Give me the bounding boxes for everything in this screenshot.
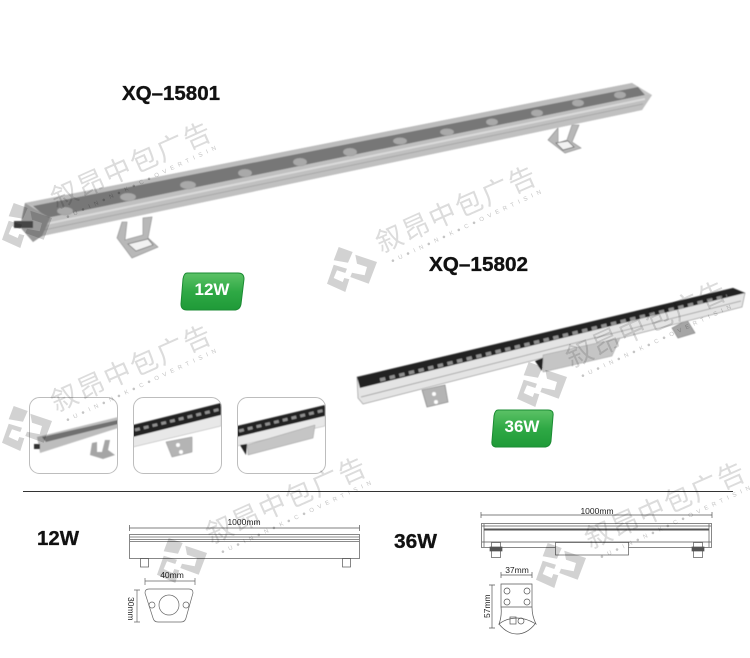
dimension drawing: 36W side view <box>481 506 712 558</box>
label: 36W: 36W <box>394 531 437 553</box>
dimension drawing: 12W end view: 40mm <box>160 570 184 580</box>
badge: 36W <box>492 410 553 447</box>
watermark 4 <box>2 320 217 451</box>
badge: 12W <box>181 273 244 310</box>
watermark 6: 叙昂中包广告 <box>580 457 750 554</box>
watermark 3 <box>517 276 732 407</box>
product: 36W LED wall washer bar <box>357 288 745 407</box>
watermark 5 <box>157 452 372 583</box>
title: XQ-15801: XQ–15801 <box>122 83 220 105</box>
thumbnail panel: mounting bracket detail <box>133 398 222 474</box>
watermark 1: 叙昂中包广告 <box>46 117 216 214</box>
product: 12W LED wall washer bar <box>14 83 652 258</box>
watermark 1: ●U●IN●N●K●C●OVERTISIN <box>65 146 217 221</box>
watermark 6: ●U●IN●N●K●C●OVERTISIN <box>599 486 750 561</box>
dimension drawing: 12W side view <box>130 517 360 567</box>
badge: 36W: 36W <box>505 417 540 436</box>
watermark 3: 叙昂中包广告 <box>561 276 731 373</box>
watermark 6 <box>536 457 750 588</box>
dimension drawing: 36W side view: 1000mm <box>580 506 614 516</box>
watermark 5: 叙昂中包广告 <box>201 452 371 549</box>
dimension drawing: 12W end view: 30mm <box>126 597 136 621</box>
thumbnail panel: driver box detail <box>237 398 326 474</box>
title: XQ-15802: XQ–15802 <box>429 254 528 276</box>
watermark 2: ●U●IN●N●K●C●OVERTISIN <box>390 190 542 265</box>
watermark 4: 叙昂中包广告 <box>46 320 216 417</box>
badge: 12W: 12W <box>195 280 230 299</box>
dimension drawing: 36W bracket: 37mm <box>505 565 529 575</box>
watermark 2 <box>327 161 542 292</box>
dimension drawing: 36W bracket <box>482 565 536 634</box>
watermark 3: ●U●IN●N●K●C●OVERTISIN <box>580 305 732 380</box>
label: 12W: 12W <box>37 528 79 550</box>
watermark 5: ●U●IN●N●K●C●OVERTISIN <box>220 481 372 556</box>
dimension drawing: 12W end view <box>126 570 195 622</box>
watermark 1 <box>2 117 217 248</box>
dimension drawing: 36W bracket: 57mm <box>482 594 492 618</box>
thumbnail panel: connector end detail <box>30 398 118 474</box>
watermark 4: ●U●IN●N●K●C●OVERTISIN <box>65 349 217 424</box>
watermark 2: 叙昂中包广告 <box>371 161 541 258</box>
dimension drawing: 12W side view: 1000mm <box>227 517 261 527</box>
